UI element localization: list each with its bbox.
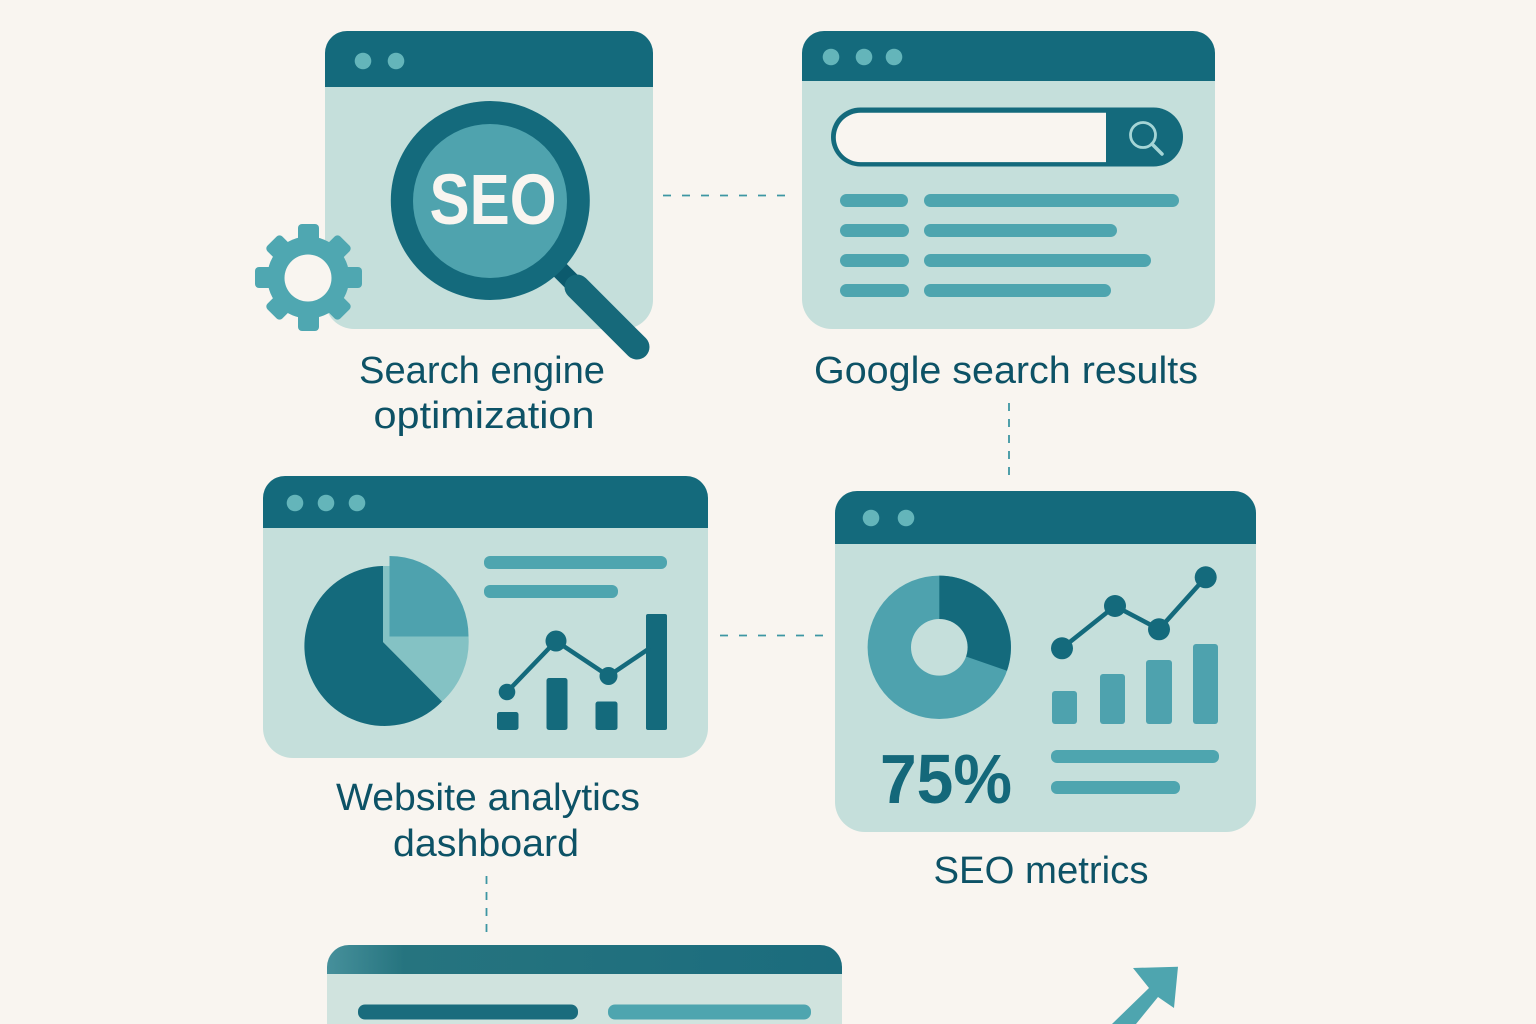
icon: gear <box>255 224 362 331</box>
donut chart <box>868 576 1011 719</box>
pie chart <box>304 556 469 726</box>
connector: dashboard to bottom window <box>486 876 488 934</box>
stat: 75%: 75% <box>880 740 1012 818</box>
bar and line chart <box>497 614 667 730</box>
text lines <box>1051 750 1219 794</box>
icon: growth arrow <box>1112 967 1178 1024</box>
icon: magnifying glass with SEO <box>391 101 637 347</box>
heading: Google search results: Google search results <box>814 350 1198 392</box>
bar and line chart <box>1051 566 1218 724</box>
text lines <box>484 556 667 598</box>
heading: search engine optimization: optimization <box>374 395 594 437</box>
connector: dashboard to metrics <box>720 634 824 636</box>
panel: analytics dashboard window <box>263 476 708 758</box>
icon: magnifying glass with SEO: SEO <box>430 161 556 240</box>
connector: Google to metrics <box>1008 403 1010 478</box>
panel: bottom browser window <box>327 945 842 1024</box>
heading: search engine optimization: Search engine <box>359 350 605 392</box>
connector: SEO to Google <box>663 194 786 196</box>
heading: SEO metrics: SEO metrics <box>934 850 1148 892</box>
heading: website analytics dashboard: Website analytics <box>336 777 640 819</box>
panel: Google search results window <box>802 31 1215 329</box>
heading: website analytics dashboard: dashboard <box>393 823 579 865</box>
search result lines <box>840 194 1179 297</box>
panel: SEO metrics window <box>835 491 1256 832</box>
search bar <box>831 108 1183 166</box>
panel: SEO browser window <box>255 31 653 347</box>
